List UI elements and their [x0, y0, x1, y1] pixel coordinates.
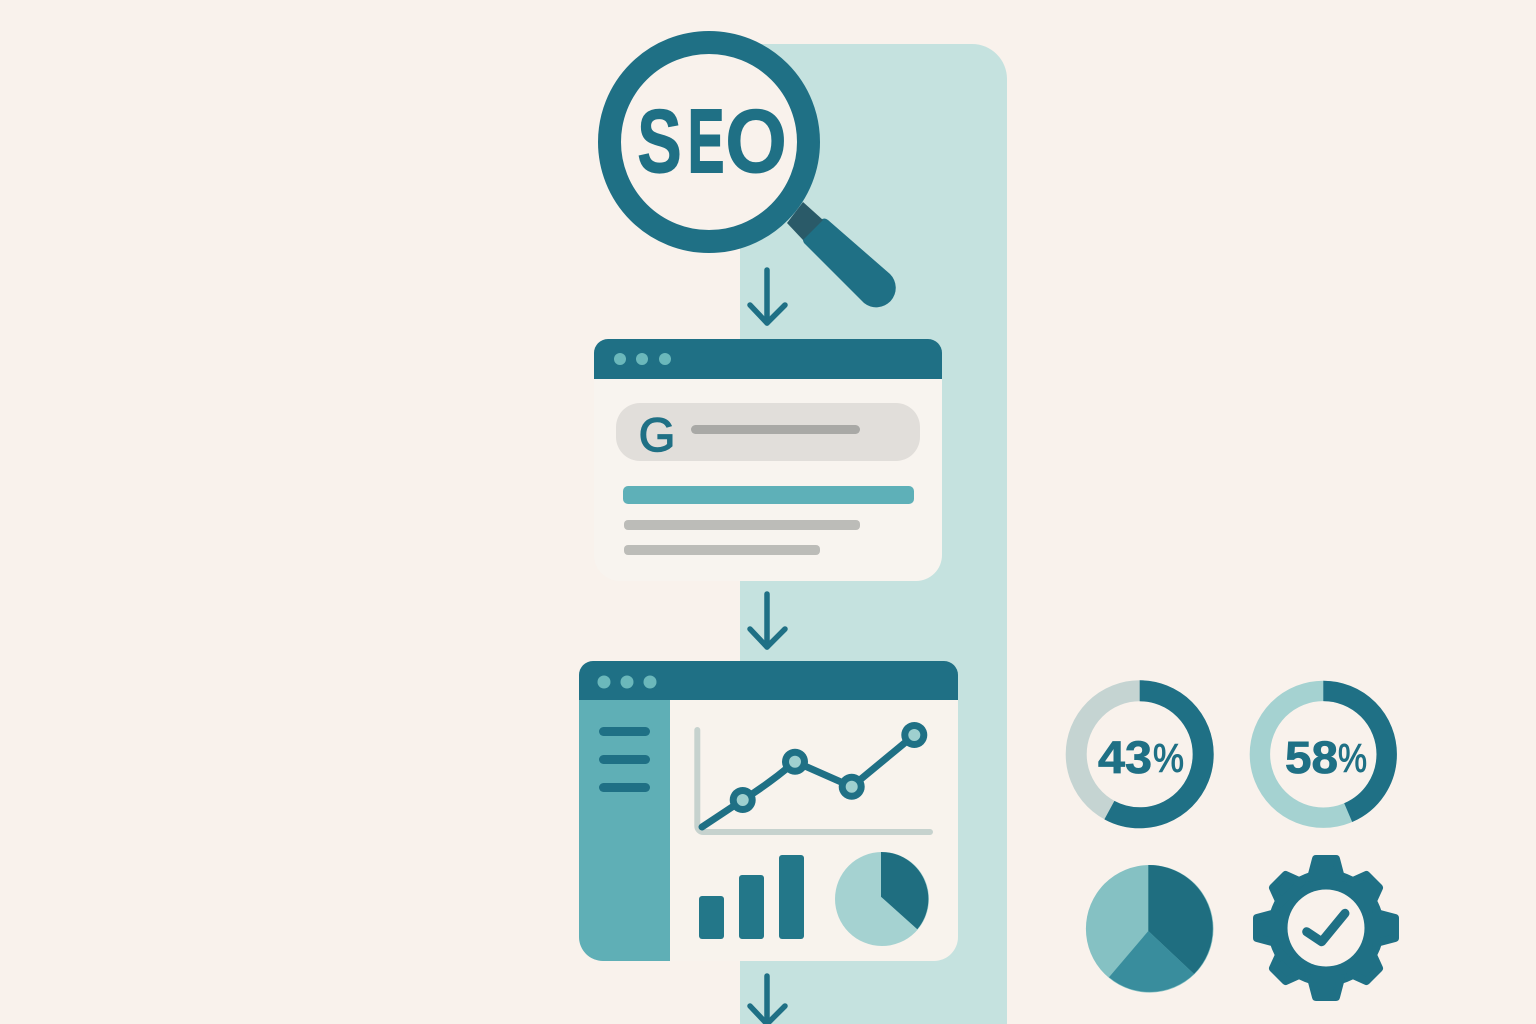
search bar	[616, 403, 920, 461]
donut: 58%: %	[1338, 737, 1367, 781]
result title bar	[623, 486, 914, 504]
result text lines	[624, 520, 860, 530]
pie chart: three segments	[1086, 865, 1213, 993]
SEO text	[637, 90, 787, 191]
search query line	[691, 425, 860, 434]
icon: G logo: G	[639, 408, 675, 461]
arrow: dashboard onward	[750, 976, 785, 1024]
panel: analytics dashboard window	[579, 661, 958, 961]
icon: gear with check	[1257, 859, 1395, 997]
donut: 43%	[1076, 691, 1203, 818]
background vertical band	[740, 44, 1007, 1024]
arrow: magnifier to search window	[750, 270, 785, 323]
SEO text: E	[688, 91, 724, 191]
magnifier neck	[787, 202, 823, 240]
window dots	[614, 353, 671, 365]
sidebar menu lines	[599, 727, 650, 792]
pie chart	[835, 852, 929, 946]
magnifier handle	[803, 218, 896, 307]
icon: SEO magnifying glass	[610, 42, 896, 307]
check mark	[1307, 913, 1345, 942]
arrow: search window to dashboard	[750, 594, 785, 647]
donut: 43%: %	[1153, 737, 1184, 781]
bar chart	[699, 855, 804, 939]
window dots	[598, 676, 656, 688]
donut: 58%: 58	[1285, 732, 1338, 783]
line chart	[697, 722, 930, 832]
SEO text: O	[725, 90, 787, 191]
panel: search results window	[594, 339, 942, 581]
donut: 58%	[1260, 691, 1387, 818]
donut: 43%: 43	[1098, 732, 1152, 783]
SEO text: S	[637, 90, 682, 191]
dashboard sidebar	[579, 700, 670, 961]
